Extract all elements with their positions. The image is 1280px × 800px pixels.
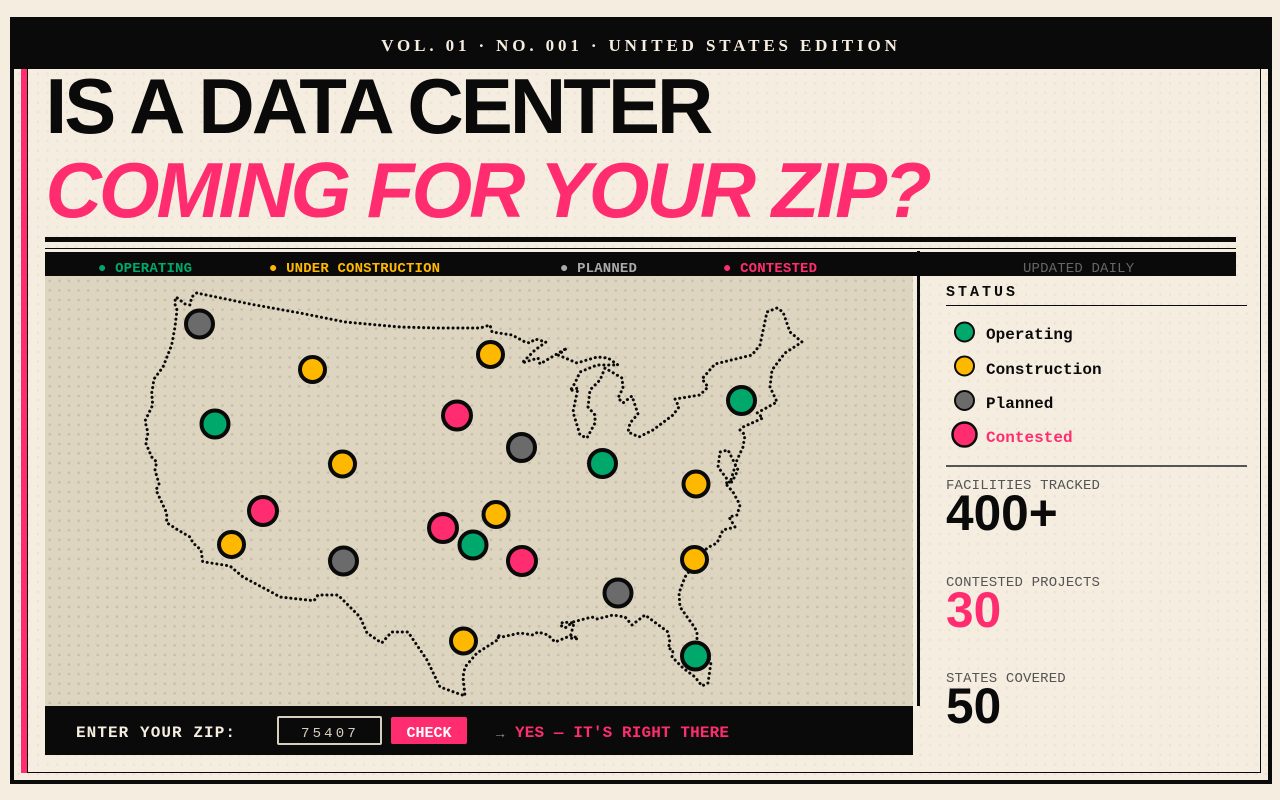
- title line two: COMING FOR YOUR ZIP?: [46, 146, 929, 234]
- ticker: under construction: ● UNDER CONSTRUCTION: [269, 261, 440, 277]
- ticker: contested: ● CONTESTED: [723, 261, 817, 277]
- facility markers: [186, 310, 755, 670]
- stat label: contested: CONTESTED PROJECTS: [946, 575, 1100, 591]
- marker: contested, Dakota: [443, 402, 471, 430]
- ticker: updated daily: UPDATED DAILY: [1023, 261, 1134, 277]
- legend icons: [951, 322, 978, 448]
- thin rule: [45, 248, 1236, 249]
- marker: construction, Minnesota: [478, 342, 503, 367]
- sidebar heading: STATUS: [946, 284, 1018, 301]
- map panel: [45, 276, 913, 706]
- marker: construction, Missouri: [484, 502, 508, 527]
- ticker: operating: ● OPERATING: [98, 261, 192, 277]
- marker: planned, Washington: [186, 310, 213, 338]
- ZIP bar: [45, 706, 913, 755]
- legend: construction: Construction: [986, 361, 1102, 379]
- edition line: VOL. 01 · NO. 001 · UNITED STATES EDITION: [381, 36, 901, 55]
- marker: operating, Indiana: [589, 450, 616, 477]
- map divider: [917, 251, 920, 706]
- result arrow: →: [496, 727, 504, 743]
- marker: contested, Kansas: [429, 514, 457, 542]
- check button: [391, 717, 467, 744]
- stat value: states: 50: [946, 678, 1001, 734]
- sidebar divider: [946, 465, 1247, 467]
- stat label: facilities: FACILITIES TRACKED: [946, 478, 1100, 494]
- marker: planned, Arizona: [330, 548, 357, 574]
- icon: operating: [955, 322, 974, 342]
- masthead band: [10, 17, 1272, 69]
- marker: contested, Arkansas: [508, 547, 536, 575]
- ZIP input: [277, 716, 382, 745]
- marker: construction, Carolina: [682, 547, 707, 572]
- ticker: planned: ● PLANNED: [560, 261, 637, 277]
- stat value: contested: 30: [946, 582, 1001, 638]
- legend: operating: Operating: [986, 326, 1073, 344]
- marker: construction, California: [219, 532, 244, 557]
- icon: construction: [955, 356, 974, 376]
- result text: YES — IT'S RIGHT THERE: [515, 724, 729, 742]
- marker: planned, Iowa: [508, 434, 535, 461]
- stat label: states: STATES COVERED: [946, 671, 1066, 687]
- marker: operating, Oklahoma: [460, 532, 486, 558]
- marker: contested, Nevada: [249, 497, 277, 525]
- ticker band: [45, 252, 1236, 276]
- icon: contested: [952, 422, 976, 446]
- ZIP label: ENTER YOUR ZIP:: [76, 724, 236, 742]
- marker: operating, New York: [728, 387, 755, 414]
- marker: operating, Florida: [682, 642, 709, 670]
- US outline: [145, 293, 802, 696]
- marker: construction, Wyoming: [330, 452, 355, 476]
- marker: construction, Texas: [451, 628, 476, 654]
- ZIP input: 75407: [301, 726, 359, 742]
- heavy rule: [45, 237, 1236, 242]
- check button: CHECK: [406, 725, 452, 742]
- icon: planned: [955, 391, 974, 410]
- marker: planned, Alabama: [604, 580, 632, 606]
- marker: construction, Virginia: [684, 472, 708, 496]
- marker: construction, Montana: [300, 357, 325, 382]
- accent bar: [21, 68, 28, 773]
- title line one: IS A DATA CENTER: [46, 62, 710, 150]
- stat value: facilities: 400+: [946, 485, 1058, 541]
- legend: contested: Contested: [986, 429, 1073, 447]
- marker: operating, Oregon: [202, 410, 228, 438]
- sidebar rule: [946, 305, 1247, 306]
- legend: planned: Planned: [986, 395, 1053, 413]
